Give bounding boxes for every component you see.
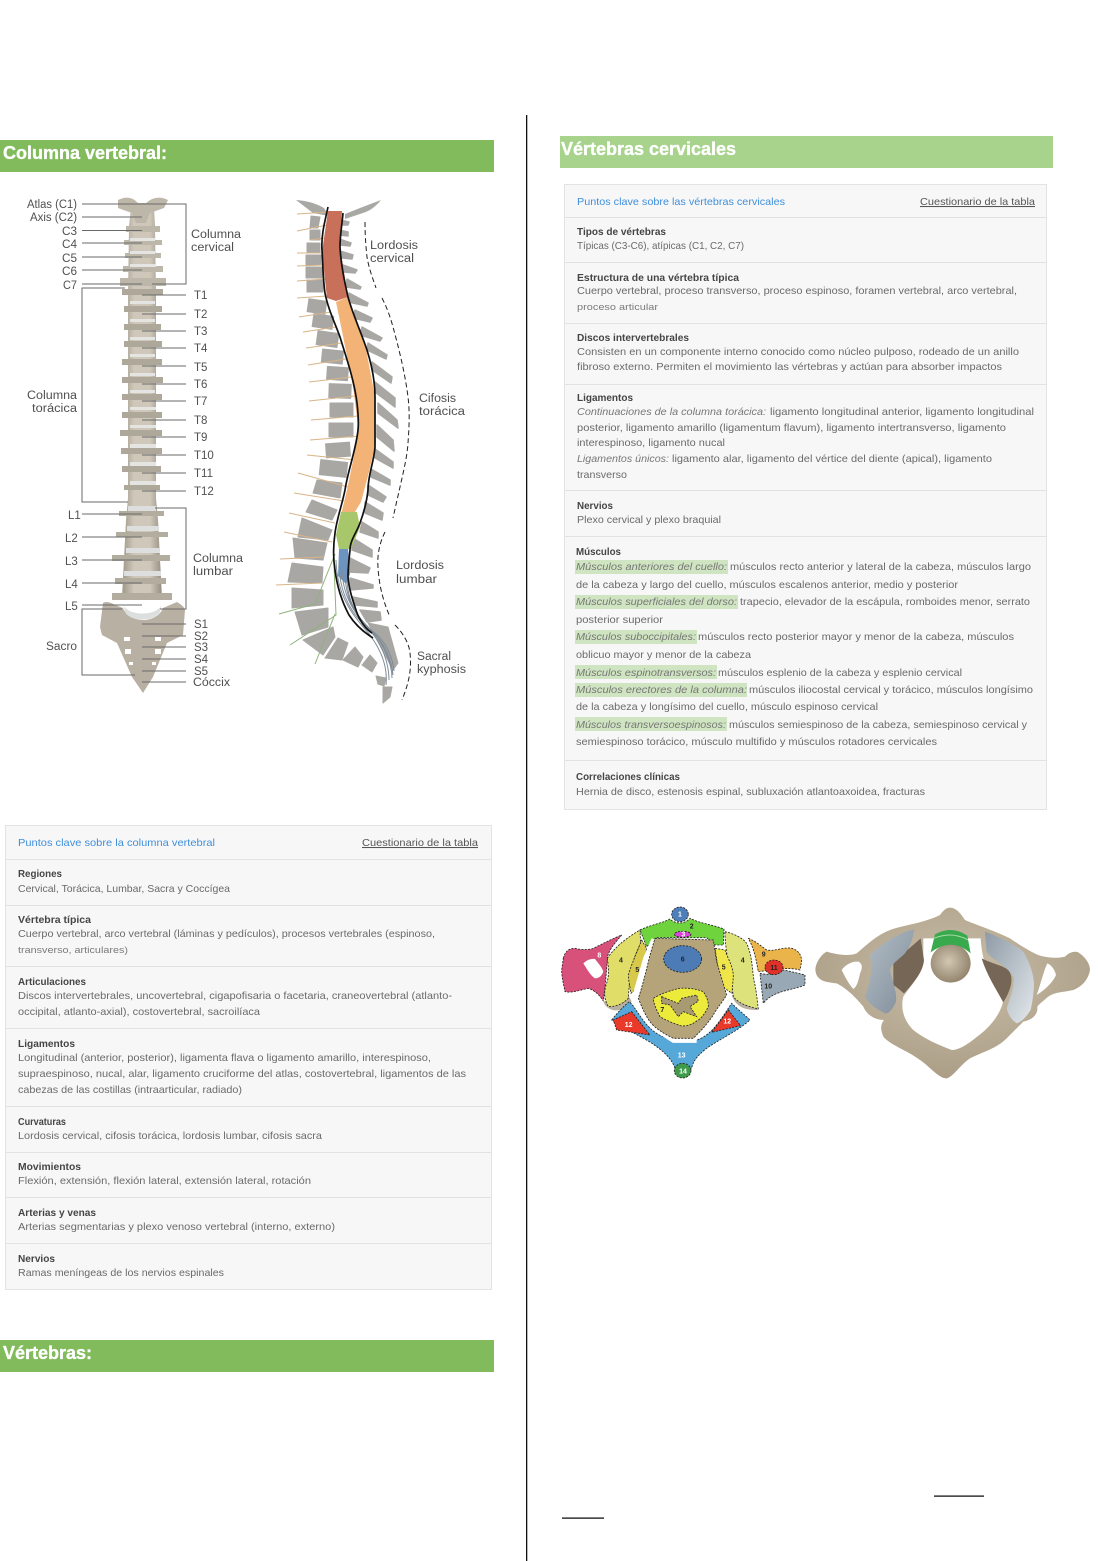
curve labels: kyphosis [417, 664, 466, 676]
row: músculos: posterior superior [576, 614, 664, 626]
labels: thoracic: T2 [194, 309, 207, 321]
row: regiones: Cervical, Torácica, Lumbar, Sacra y Coccígea [18, 883, 230, 895]
heading: Columna vertebral: Columna vertebral: [3, 142, 167, 163]
row: ligamentos [18, 1038, 466, 1096]
row: tipos de vértebras [577, 226, 744, 252]
labels: lumbar: L4 [65, 579, 78, 591]
numbers: 4 [741, 958, 745, 965]
labels: sacrum and coccyx: Cóccix [193, 677, 230, 689]
numbers: 3 [681, 932, 685, 939]
curve labels: lumbar [396, 574, 437, 586]
labels: thoracic: T12 [194, 486, 214, 498]
numbers: 6 [681, 956, 685, 963]
row: músculos [575, 546, 1033, 748]
labels: sacrum and coccyx [46, 619, 230, 689]
curve labels: Cifosis [419, 393, 456, 405]
curve labels: Lordosis [370, 240, 418, 252]
row: estructura: Cuerpo vertebral, proceso transverso, proceso espinoso, foramen vertebral, arco vertebral, [577, 285, 1017, 297]
numbers: 5 [722, 965, 726, 972]
labels: lumbar: L3 [65, 556, 78, 568]
row: nervios [577, 500, 721, 526]
labels: sacrum and coccyx: Sacro [46, 641, 77, 653]
numbers: 5 [635, 967, 639, 974]
row: nervios: Nervios [577, 500, 613, 512]
row: regiones [18, 868, 230, 895]
labels: thoracic: T10 [194, 450, 214, 462]
row: nervios: Plexo cervical y plexo braquial [577, 514, 721, 526]
labels: sacrum and coccyx: S4 [194, 654, 209, 666]
row: ligamentos: transverso [577, 469, 627, 481]
row: ligamentos: posterior, ligamento amarillo (ligamentum flavum), ligamento intertransverso, ligamento [577, 422, 1006, 434]
numbers: 13 [678, 1053, 686, 1060]
row: ligamentos: Ligamentos [18, 1038, 75, 1050]
labels: thoracic: T7 [194, 396, 207, 408]
row: arterias y venas [18, 1207, 335, 1233]
row: articulaciones: Discos intervertebrales, uncovertebral, cigapofisaria o facetaria, craneovertebral (atlanto- [18, 990, 453, 1002]
row: tipos de vértebras: Típicas (C3-C6), atípicas (C1, C2, C7) [577, 240, 744, 252]
labels: sacrum and coccyx: S1 [194, 619, 208, 631]
row: vértebra típica: transverso, articulares) [18, 945, 128, 956]
curve labels: Lordosis [396, 560, 444, 572]
numbers: 9 [762, 952, 766, 959]
row: vértebra típica: Vértebra típica [18, 914, 91, 926]
foramen and transverse holes [902, 938, 1003, 1050]
table title: Puntos clave sobre la columna vertebral [18, 837, 215, 849]
labels: thoracic: T3 [194, 326, 207, 338]
table title [577, 196, 1035, 208]
row: articulaciones: Articulaciones [18, 976, 86, 988]
row: movimientos: Movimientos [18, 1161, 81, 1173]
curve labels: torácica [419, 406, 466, 418]
labels: thoracic: T11 [194, 468, 213, 480]
row: estructura: Estructura de una vértebra típica [577, 272, 739, 284]
labels: thoracic: T1 [194, 290, 207, 302]
figure: atlas bone with transverse ligament [815, 908, 1090, 1078]
row: tipos de vértebras: Tipos de vértebras [577, 226, 666, 238]
row: nervios [18, 1253, 224, 1279]
row: articulaciones: occipital, atlanto-axial), costovertebral, sacroilíaca [18, 1006, 260, 1018]
numbers: 11 [770, 965, 778, 972]
heading: Vértebras cervicales: Vértebras cervicales [561, 138, 736, 159]
numbers: 10 [764, 983, 772, 990]
labels: lumbar [65, 510, 244, 613]
ring regions [562, 918, 805, 1068]
labels: sacrum and coccyx: S2 [194, 631, 208, 643]
row: regiones: Regiones [18, 868, 62, 880]
row: curvaturas: Lordosis cervical, cifosis torácica, lordosis lumbar, cifosis sacra [18, 1130, 322, 1142]
leader lines and brackets [82, 204, 186, 682]
white rim around the canal [633, 939, 697, 1041]
figure: front view of the vertebral column [27, 198, 244, 693]
numbers: 2 [690, 923, 694, 930]
labels: sacrum and coccyx: S5 [194, 666, 208, 678]
highlighted muscle groups [575, 560, 747, 731]
labels: thoracic: T5 [194, 362, 207, 374]
spinal cord: cervical [322, 211, 348, 301]
central region [638, 938, 727, 1038]
labels: cervical: C3 [62, 226, 77, 238]
row: músculos: oblicuo mayor y menor de la cabeza [576, 649, 751, 661]
labels: cervical: Atlas (C1) [27, 199, 77, 211]
numbers: 1 [678, 912, 682, 919]
row: músculos: Músculos transversoespinosos: [576, 719, 726, 731]
labels: thoracic: T4 [194, 343, 208, 355]
labels: cervical: C5 [62, 253, 77, 265]
labels: cervical: C4 [62, 239, 78, 251]
cauda equina [336, 560, 394, 685]
labels: cervical: C6 [62, 266, 77, 278]
row: ligamentos: supraespinoso, nucal, alar, ligamento cruciforme del atlas, costovertebral, ligamentos de las [18, 1068, 466, 1080]
numbers: 8 [597, 952, 601, 959]
row: ligamentos: interespinoso, ligamento nucal [577, 437, 725, 449]
labels: thoracic [27, 290, 214, 498]
labels: lumbar: L1 [68, 510, 81, 522]
row: ligamentos: Continuaciones de la columna torácica: [577, 406, 766, 418]
row: discos intervertebrales [577, 332, 1019, 373]
labels: cervical: C7 [63, 280, 77, 292]
spinal cord: lumbar [336, 512, 360, 549]
dura mater [322, 207, 375, 638]
labels: thoracic: T6 [194, 379, 207, 391]
row: movimientos: Flexión, extensión, flexión lateral, extensión lateral, rotación [18, 1175, 311, 1187]
row: músculos: Músculos [576, 546, 621, 558]
spinous processes [339, 220, 398, 622]
curve labels: Sacral [417, 651, 451, 663]
labels: lumbar: L2 [65, 533, 78, 545]
row: ligamentos: ligamento alar, ligamento del vértice del diente (apical), ligamento [672, 453, 992, 465]
row: curvaturas: Curvaturas [18, 1116, 66, 1128]
labels: thoracic: Columna [27, 390, 78, 402]
labels: lumbar: Columna [193, 553, 244, 565]
shadowed bone [893, 938, 1011, 1002]
heading: Columna vertebral [0, 140, 494, 172]
heading: Vértebras: Vértebras: [3, 1342, 92, 1363]
row: músculos: Músculos anteriores del cuello: [576, 561, 727, 573]
labels: cervical: cervical [191, 242, 234, 254]
row: arterias y venas: Arterias segmentarias y plexo venoso vertebral (interno, externo) [18, 1221, 335, 1233]
row: discos intervertebrales: Consisten en un componente interno conocido como núcleo pulposo, rodeado de un anillo [577, 346, 1019, 358]
numbers: 12 [723, 1019, 731, 1026]
labels: thoracic: T8 [194, 415, 207, 427]
numbers: 12 [625, 1022, 633, 1029]
row: músculos: músculos recto posterior mayor y menor de la cabeza, músculos [698, 631, 1014, 643]
numbers: 4 [619, 958, 623, 965]
transverse ligament [931, 930, 971, 953]
curve guides [365, 222, 411, 700]
labels: lumbar: L5 [65, 601, 78, 613]
table title: Puntos clave sobre las vértebras cervicales [577, 196, 785, 208]
heading: Vértebras [0, 1340, 494, 1372]
row: correlaciones clínicas: Correlaciones clínicas [576, 771, 680, 783]
labels: thoracic: T9 [194, 432, 207, 444]
row: estructura: proceso articular [577, 302, 658, 313]
row: discos intervertebrales: fibroso externo. Permiten el movimiento las vértebras y actúan para absorber impactos [577, 361, 1002, 373]
numbers: 14 [679, 1068, 687, 1075]
table title: Cuestionario de la tabla [362, 837, 478, 849]
row: articulaciones [18, 976, 453, 1018]
row: músculos: Músculos suboccipitales: [576, 631, 696, 643]
table title [18, 837, 478, 849]
row: músculos: semiespinoso torácico, músculo multifido y músculos rotadores cervicales [576, 736, 937, 748]
heading: Vértebras cervicales [560, 136, 1053, 168]
row: correlaciones clínicas: Hernia de disco, estenosis espinal, subluxación atlantoaxoidea, fracturas [576, 786, 925, 798]
blank underlines at page bottom [562, 1496, 984, 1519]
figure: lateral view of the spinal cord and curves [276, 200, 466, 703]
row: curvaturas [18, 1116, 322, 1142]
labels: sacrum and coccyx: S3 [194, 642, 208, 654]
row: ligamentos: ligamento longitudinal anterior, ligamento longitudinal [770, 406, 1034, 418]
row: músculos: músculos semiespinoso de la cabeza, semiespinoso cervical y [729, 719, 1028, 731]
row: estructura [577, 272, 1017, 313]
numbers: 7 [660, 1007, 664, 1014]
row: músculos: músculos esplenio de la cabeza y esplenio cervical [718, 667, 962, 679]
row: músculos: Músculos erectores de la columna: [576, 684, 747, 696]
labels: cervical: Axis (C2) [30, 212, 77, 224]
row: ligamentos: Ligamentos [577, 392, 633, 404]
row: vértebra típica [18, 914, 435, 956]
row: nervios: Nervios [18, 1253, 55, 1265]
bone outline [815, 908, 1090, 1078]
row: músculos: músculos recto anterior y lateral de la cabeza, músculos largo [730, 561, 1031, 573]
labels: thoracic: torácica [32, 403, 78, 415]
labels: lumbar: lumbar [193, 566, 233, 578]
row: nervios: Ramas meníngeas de los nervios espinales [18, 1267, 224, 1279]
row: ligamentos: cabezas de las costillas (intraarticular, radiado) [18, 1084, 242, 1096]
skull base [296, 200, 381, 219]
row: músculos: músculos iliocostal cervical y torácico, músculos longísimo [749, 684, 1033, 696]
row: discos intervertebrales: Discos intervertebrales [577, 332, 689, 344]
row: músculos: de la cabeza y largo del cuello, músculos escalenos anterior, medio y posterior [576, 579, 959, 591]
dens [931, 944, 971, 983]
row: músculos: Músculos espinotransversos: [576, 667, 716, 679]
row: correlaciones clínicas [576, 771, 925, 798]
curve labels: cervical [370, 253, 414, 265]
labels: cervical: Columna [191, 229, 242, 241]
column bones [100, 198, 185, 693]
figure: numbered atlas diagram [562, 907, 805, 1078]
facets [865, 929, 914, 1014]
row: arterias y venas: Arterias y venas [18, 1207, 96, 1219]
row: músculos: de la cabeza y longísimo del cuello, músculo espinoso cervical [576, 701, 878, 713]
grey bone rim under lateral masses [603, 995, 758, 1010]
spinal cord: thoracic [336, 297, 376, 515]
panel: key points on the cervical vertebrae [564, 184, 1046, 810]
spinal cord: sacral [338, 549, 350, 584]
row: vértebra típica: Cuerpo vertebral, arco vertebral (láminas y pedículos), procesos vertebrales (espinoso, [18, 928, 435, 940]
numbers [597, 912, 778, 1075]
panel: key points on the vertebral column [6, 826, 492, 1290]
row: músculos: Músculos superficiales del dorso: [576, 596, 737, 608]
row: movimientos [18, 1161, 311, 1187]
row: músculos: trapecio, elevador de la escápula, romboides menor, serrato [740, 596, 1030, 608]
row: ligamentos: Longitudinal (anterior, posterior), ligamenta flava o ligamento amarillo, interespinoso, [18, 1052, 431, 1064]
nerve roots [276, 212, 360, 585]
labels: cervical [27, 199, 242, 292]
table title: Cuestionario de la tabla [920, 196, 1035, 208]
vertebral bodies [288, 216, 398, 703]
row: ligamentos: Ligamentos únicos: [577, 453, 669, 465]
row: ligamentos [577, 392, 1034, 481]
curve labels [370, 240, 466, 676]
